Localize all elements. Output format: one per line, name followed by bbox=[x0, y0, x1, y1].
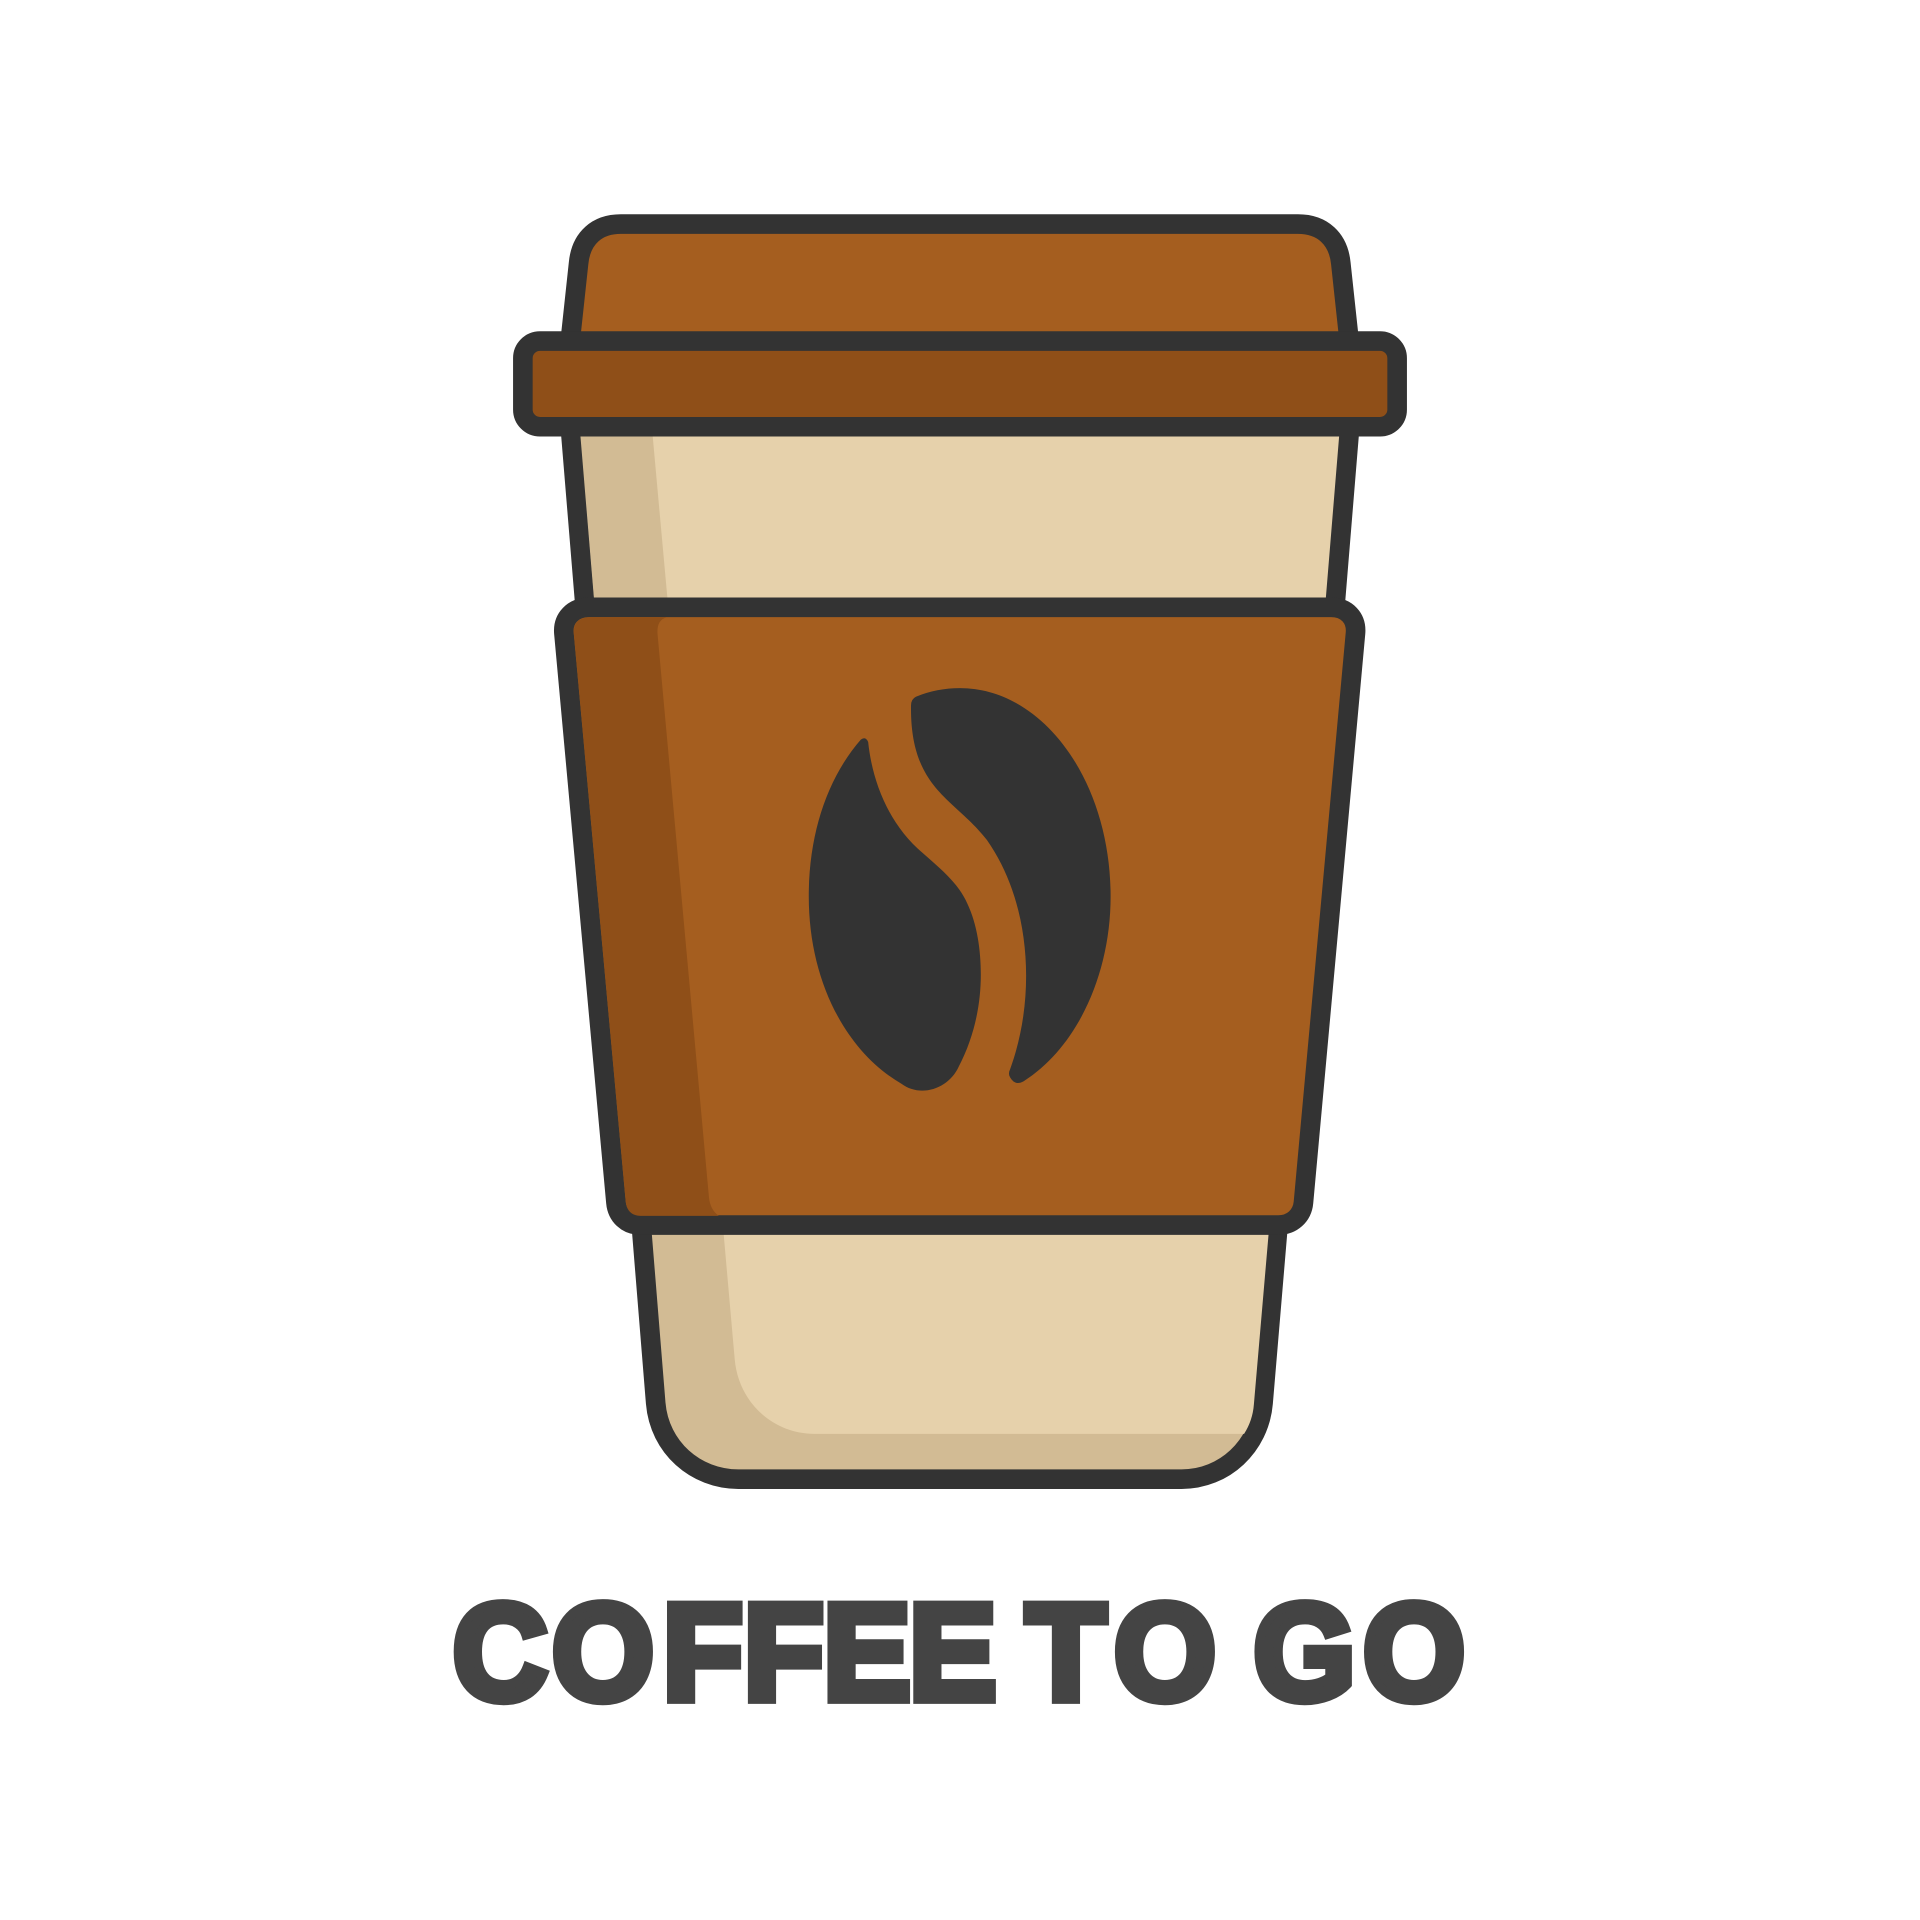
upper cup body bbox=[570, 424, 1350, 610]
lid rim band bbox=[523, 341, 1397, 427]
coffee cup bbox=[523, 224, 1397, 1479]
bean right half bbox=[911, 688, 1111, 1083]
icon: coffee bean bbox=[809, 688, 1111, 1091]
title: COFFEE TO GO bbox=[0, 1577, 1465, 1729]
cup sleeve bbox=[564, 607, 1356, 1225]
lid dome bbox=[570, 224, 1349, 343]
lower cup body bbox=[641, 1222, 1278, 1479]
bean left half bbox=[809, 738, 981, 1091]
